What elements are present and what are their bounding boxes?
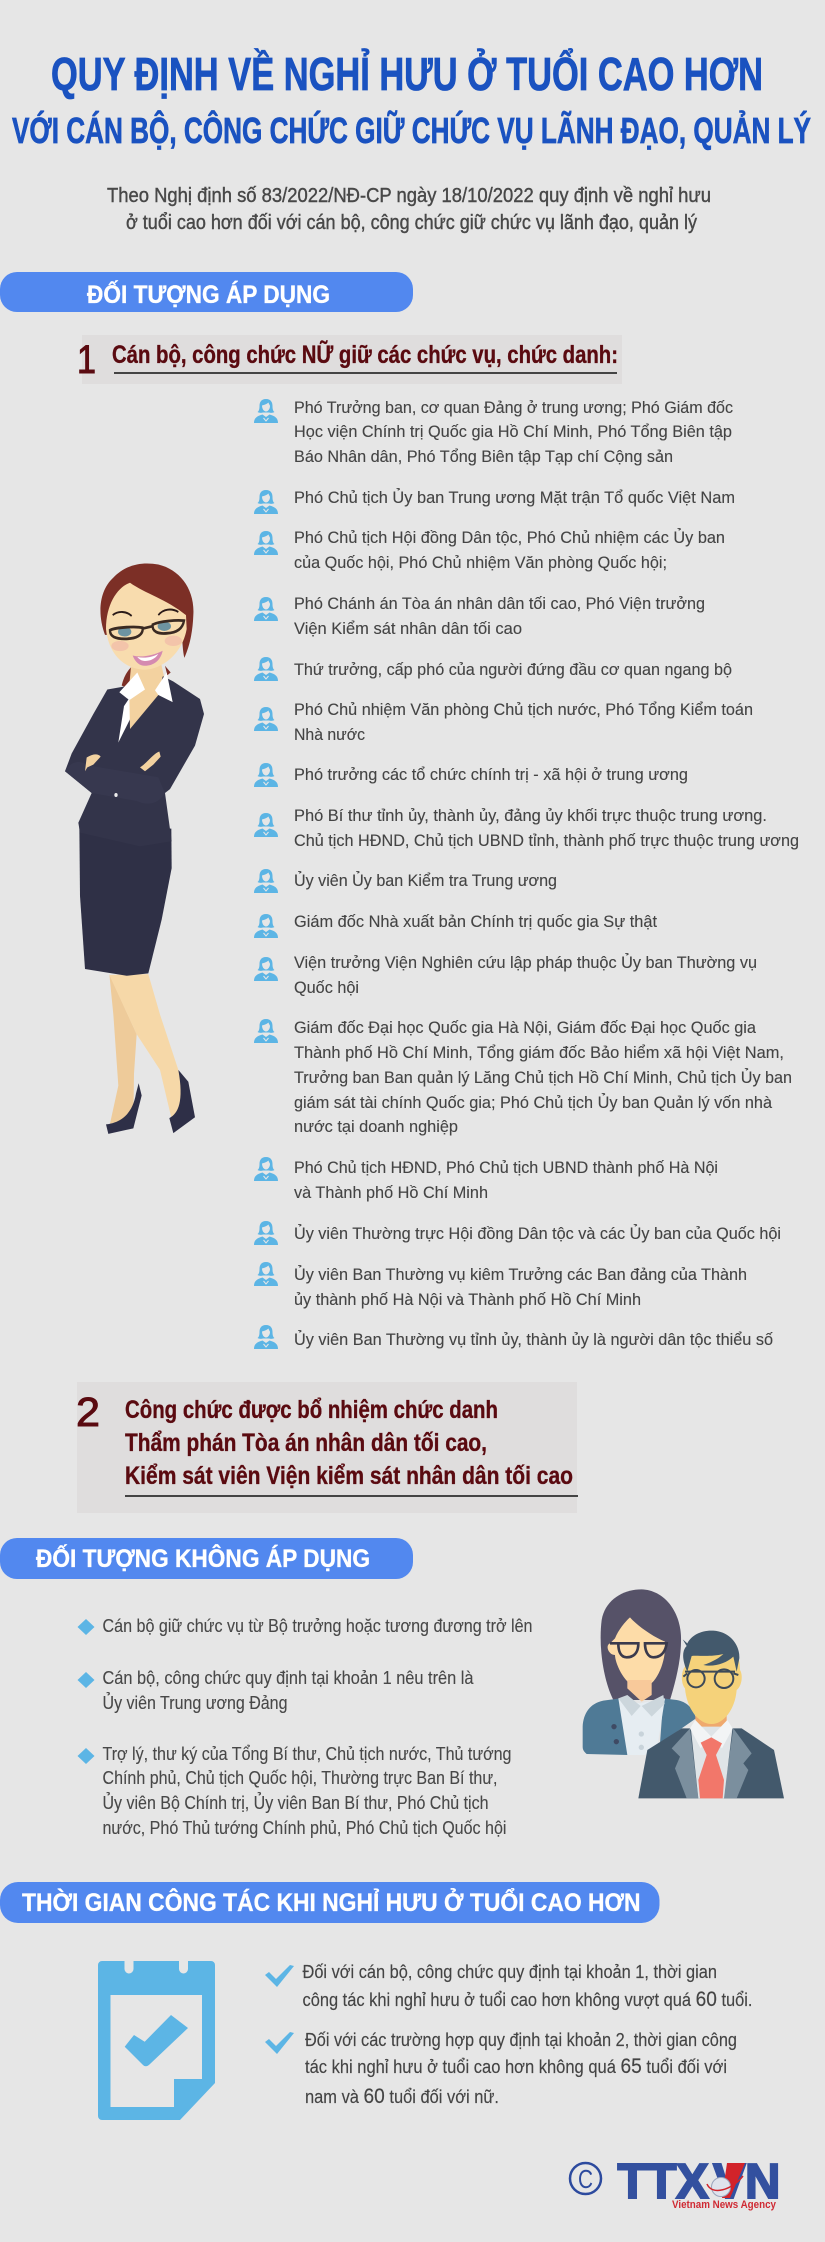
item 12: Thành phố Hồ Chí Minh, Tổng giám đốc Bảo hiểm xã hội Việt Nam,	[294, 1043, 784, 1062]
section header: đối tượng không áp dụng	[0, 1538, 413, 1579]
item 12: Trưởng ban Ban quản lý Lăng Chủ tịch Hồ Chí Minh, Chủ tịch Ủy ban	[294, 1068, 792, 1087]
bullet 1: Cán bộ giữ chức vụ từ Bộ trưởng hoặc tương đương trở lên	[102, 1615, 532, 1636]
skirt	[79, 825, 172, 976]
man suit	[638, 1728, 784, 1798]
illustration: two officials	[583, 1589, 784, 1798]
list: female positions	[254, 398, 799, 1349]
logo: TTXVN: TTXVN	[618, 2155, 780, 2209]
bullet 3	[78, 1743, 512, 1838]
item 11: Viện trưởng Viện Nghiên cứu lập pháp thuộc Ủy ban Thường vụ	[294, 953, 757, 972]
time limit 2: tác khi nghỉ hưu ở tuổi cao hơn không quá 65 tuổi đối với	[305, 2054, 727, 2078]
item 3: Phó Chủ tịch Hội đồng Dân tộc, Phó Chủ nhiệm các Ủy ban	[294, 528, 725, 547]
item 11	[254, 953, 757, 997]
section header: đối tượng áp dụng: ĐỐI TƯỢNG ÁP DỤNG	[87, 279, 330, 309]
item 6: Phó Chủ nhiệm Văn phòng Chủ tịch nước, Phó Tổng Kiểm toán	[294, 700, 753, 719]
list: excluded	[78, 1615, 532, 1838]
item 4: Viện Kiểm sát nhân dân tối cao	[294, 619, 522, 638]
heading 1: Cán bộ, công chức NỮ giữ các chức vụ, chức danh:	[112, 339, 618, 369]
woman face	[608, 1617, 665, 1688]
item 9: Ủy viên Ủy ban Kiểm tra Trung ương	[294, 871, 557, 890]
neck	[128, 659, 164, 714]
woman jacket	[583, 1698, 696, 1755]
bullet 3: Ủy viên Bộ Chính trị, Ủy viên Ban Bí thư, Phó Chủ tịch	[102, 1792, 488, 1813]
item 8: Phó Bí thư tỉnh ủy, thành ủy, đảng ủy khối trực thuộc trung ương.	[294, 806, 767, 825]
item 12: nước tại doanh nghiệp	[294, 1117, 458, 1136]
eyes	[118, 627, 131, 636]
ponytail and back hair	[100, 563, 193, 687]
bullet 3: nước, Phó Thủ tướng Chính phủ, Phó Chủ tịch Quốc hội	[102, 1817, 506, 1838]
item 9	[254, 869, 557, 893]
item 4: Phó Chánh án Tòa án nhân dân tối cao, Phó Viện trưởng	[294, 594, 705, 613]
heading 2	[76, 1382, 578, 1513]
item 11: Quốc hội	[294, 978, 359, 997]
jacket	[65, 676, 204, 846]
woman hair	[601, 1589, 681, 1700]
item 15: Ủy viên Ban Thường vụ kiêm Trưởng các Ban đảng của Thành	[294, 1265, 747, 1284]
item 2	[254, 488, 735, 514]
item 15: ủy thành phố Hà Nội và Thành phố Hồ Chí Minh	[294, 1290, 641, 1309]
heading 2: 2	[76, 1389, 100, 1435]
item 8: Chủ tịch HĐND, Chủ tịch UBND tỉnh, thành phố trực thuộc trung ương	[294, 831, 799, 850]
item 5: Thứ trưởng, cấp phó của người đứng đầu cơ quan ngang bộ	[294, 660, 732, 679]
item 10	[254, 912, 657, 938]
bullet 2: Cán bộ, công chức quy định tại khoản 1 nêu trên là	[102, 1667, 474, 1688]
subtitle: ở tuổi cao hơn đối với cán bộ, công chức giữ chức vụ lãnh đạo, quản lý	[126, 212, 697, 234]
item 1: Học viện Chính trị Quốc gia Hồ Chí Minh, Phó Tổng Biên tập	[294, 422, 732, 441]
heading 1	[77, 335, 622, 384]
bullet 2: Ủy viên Trung ương Đảng	[102, 1692, 288, 1713]
woman glasses	[610, 1643, 667, 1657]
item 12: Giám đốc Đại học Quốc gia Hà Nội, Giám đốc Đại học Quốc gia	[294, 1018, 757, 1037]
item 1: Báo Nhân dân, Phó Tổng Biên tập Tạp chí Cộng sản	[294, 447, 673, 466]
time limit 2	[265, 2029, 737, 2108]
time limit 1	[265, 1961, 753, 2011]
glasses	[110, 620, 184, 639]
item 13: và Thành phố Hồ Chí Minh	[294, 1183, 488, 1202]
heading 2: Kiểm sát viên Viện kiểm sát nhân dân tối cao	[125, 1462, 573, 1490]
man face	[682, 1645, 742, 1724]
title	[12, 48, 811, 151]
illustration: businesswoman	[65, 563, 204, 1134]
logo: TTXVN: Vietnam News Agency	[672, 2199, 777, 2211]
man hair	[683, 1631, 739, 1672]
shoes	[106, 1083, 142, 1134]
item 7: Phó trưởng các tổ chức chính trị - xã hội ở trung ương	[294, 765, 688, 784]
item 4	[254, 594, 705, 638]
heading 1: 1	[77, 338, 96, 382]
item 2: Phó Chủ tịch Ủy ban Trung ương Mặt trận Tổ quốc Việt Nam	[294, 488, 735, 507]
legs	[109, 974, 137, 1124]
time limit 1: Đối với cán bộ, công chức quy định tại khoản 1, thời gian	[302, 1961, 717, 1982]
section header: đối tượng áp dụng	[0, 272, 413, 312]
section header: thời gian công tác	[0, 1882, 660, 1923]
time limit 1: công tác khi nghỉ hưu ở tuổi cao hơn không vượt quá 60 tuổi.	[302, 1987, 753, 2011]
man glasses	[683, 1669, 738, 1688]
item 10: Giám đốc Nhà xuất bản Chính trị quốc gia Sự thật	[294, 912, 657, 931]
item 12: giám sát tài chính Quốc gia; Phó Chủ tịch Ủy ban Quản lý vốn nhà	[294, 1093, 773, 1112]
woman shirt	[618, 1698, 665, 1755]
item 13: Phó Chủ tịch HĐND, Phó Chủ tịch UBND thành phố Hà Nội	[294, 1158, 718, 1177]
item 1	[254, 398, 733, 466]
copyright mark	[570, 2163, 601, 2194]
collar and shirt	[118, 689, 145, 742]
item 15	[254, 1262, 747, 1309]
copyright mark: C	[578, 2164, 593, 2194]
subtitle: Theo Nghị định số 83/2022/NĐ-CP ngày 18/10/2022 quy định về nghỉ hưu	[107, 185, 711, 207]
heading 2: Công chức được bổ nhiệm chức danh	[125, 1396, 498, 1424]
face	[106, 583, 187, 670]
subtitle	[107, 185, 711, 234]
item 3	[254, 528, 725, 572]
time limit 2: nam và 60 tuổi đối với nữ.	[305, 2084, 499, 2108]
item 16: Ủy viên Ban Thường vụ tỉnh ủy, thành ủy là người dân tộc thiểu số	[294, 1330, 773, 1349]
icon: document with check	[98, 1961, 215, 2120]
section header: đối tượng không áp dụng: ĐỐI TƯỢNG KHÔNG ÁP DỤNG	[36, 1543, 370, 1573]
item 3: của Quốc hội, Phó Chủ nhiệm Văn phòng Quốc hội;	[294, 553, 667, 572]
item 14: Ủy viên Thường trực Hội đồng Dân tộc và các Ủy ban của Quốc hội	[294, 1224, 781, 1243]
item 1: Phó Trưởng ban, cơ quan Đảng ở trung ương; Phó Giám đốc	[294, 398, 733, 417]
blush and lips	[111, 641, 129, 651]
man shirt and tie	[691, 1727, 733, 1798]
item 6: Nhà nước	[294, 725, 365, 744]
time limit 2: Đối với các trường hợp quy định tại khoản 2, thời gian công	[305, 2029, 737, 2050]
bullet 3: Trợ lý, thư ký của Tổng Bí thư, Chủ tịch nước, Thủ tướng	[102, 1743, 512, 1764]
item 13	[254, 1157, 718, 1202]
man neck	[695, 1712, 727, 1737]
section header: thời gian công tác: THỜI GIAN CÔNG TÁC KHI NGHỈ HƯU Ở TUỔI CAO HƠN	[22, 1887, 640, 1917]
bullet 3: Chính phủ, Chủ tịch Quốc hội, Thường trực Ban Bí thư,	[102, 1767, 498, 1788]
item 12	[254, 1018, 792, 1136]
heading 2: Thẩm phán Tòa án nhân dân tối cao,	[125, 1429, 487, 1457]
item 6	[254, 700, 753, 744]
item 8	[254, 806, 799, 850]
crossed arms	[65, 762, 165, 804]
bullet 2	[78, 1667, 474, 1713]
